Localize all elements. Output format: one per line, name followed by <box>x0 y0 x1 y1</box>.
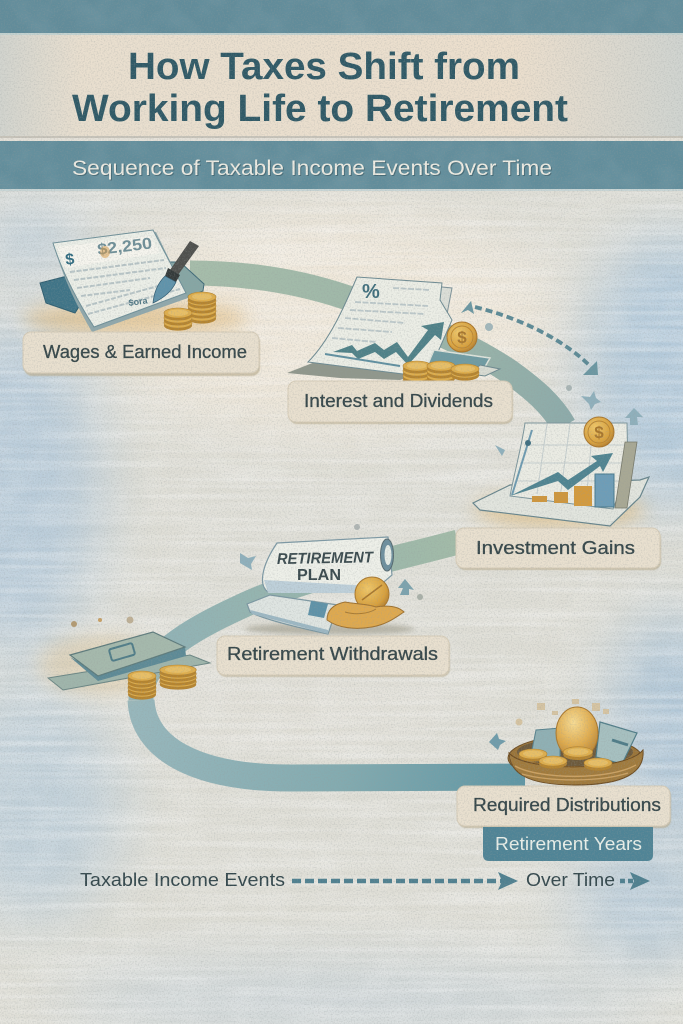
illustration: paycheck: $ <box>64 251 75 269</box>
label: investment gains <box>456 528 661 570</box>
coins <box>128 665 196 700</box>
decorative sparkles <box>354 323 643 530</box>
illustration: investment chart <box>473 417 649 528</box>
title: Working Life to Retirement <box>72 88 568 130</box>
label: retirement withdrawals <box>217 636 450 677</box>
bottom timeline caption <box>80 869 650 890</box>
badge: retirement years: Retirement Years <box>495 834 642 854</box>
check paper <box>53 232 188 332</box>
dollar coin: $ <box>594 423 604 442</box>
path segment: investment gains to withdrawals <box>141 542 458 700</box>
dollar coin <box>447 322 477 352</box>
flying bits <box>516 699 609 726</box>
coin stacks <box>403 361 479 389</box>
ruler <box>615 442 637 508</box>
dashed arrow: interest to gains <box>461 301 598 375</box>
top teal band <box>0 0 683 33</box>
illustration: interest statement <box>287 277 500 389</box>
dollar coin: $ <box>457 328 467 347</box>
trend arrow <box>510 453 613 496</box>
shadow <box>245 623 415 635</box>
rising line chart <box>333 322 444 365</box>
label: required distributions: Required Distributions <box>473 795 661 815</box>
sleeve <box>247 595 338 634</box>
shadow <box>287 362 425 380</box>
subtitle: Sequence of Taxable Income Events Over Time <box>73 158 553 181</box>
cash <box>530 728 560 762</box>
back rim of nest <box>508 736 642 780</box>
check text lines <box>70 260 180 314</box>
title <box>72 46 568 130</box>
subtitle: Sequence of Taxable Income Events Over Time <box>72 157 552 180</box>
check amount: $2,250 <box>96 235 153 259</box>
path segment: withdrawals to required distributions <box>141 700 525 778</box>
path segment: wages to investment gains <box>190 273 564 426</box>
illustration: retirement plan and hand <box>240 537 423 635</box>
ground stain <box>475 492 645 528</box>
caption: over time: Over Time <box>526 869 615 890</box>
header bands <box>0 0 683 191</box>
grid sheet <box>510 423 628 509</box>
illustration: paycheck: $ora <box>128 295 149 308</box>
lower bill <box>48 655 210 690</box>
pen <box>170 241 199 275</box>
label: wages and earned income: Wages & Earned Income <box>43 342 247 362</box>
dashed arrow <box>292 872 518 890</box>
cash <box>428 350 490 372</box>
label: wages and earned income <box>23 332 260 376</box>
title: How Taxes Shift from <box>128 46 520 88</box>
illustration: cash and coins <box>38 616 210 700</box>
coin stacks <box>164 292 216 331</box>
egg <box>556 707 598 759</box>
label: interest and dividends: Interest and Dividends <box>304 391 493 411</box>
top bills <box>70 647 186 681</box>
text lines <box>332 288 430 342</box>
caption: taxable income events: Taxable Income Events <box>80 869 285 890</box>
dollar coin <box>584 417 614 447</box>
badge: retirement years <box>483 827 653 861</box>
main statement <box>308 277 452 377</box>
ground stain <box>38 635 162 695</box>
timeline path <box>141 273 564 778</box>
label: investment gains: Investment Gains <box>476 538 635 558</box>
illustration: nest egg <box>489 699 643 785</box>
percent sign: % <box>362 281 380 303</box>
illustration: paycheck <box>23 230 247 336</box>
subtitle teal band <box>0 141 683 189</box>
scroll <box>262 537 392 592</box>
short arrow <box>620 872 650 890</box>
hand <box>327 602 404 628</box>
star icons <box>240 553 256 570</box>
label: required distributions <box>457 786 671 828</box>
money stack <box>40 274 80 313</box>
band mottling <box>0 0 683 33</box>
coin <box>355 577 389 611</box>
base paper <box>473 477 649 526</box>
title cream band <box>0 35 683 137</box>
ground stain <box>23 300 247 336</box>
illustration: retirement plan and hand: PLAN <box>297 567 341 584</box>
bars <box>532 496 547 502</box>
label: interest and dividends <box>288 381 513 424</box>
nest front <box>509 750 643 785</box>
scroll text: RETIREMENT <box>277 549 375 568</box>
back page <box>395 283 452 340</box>
label: retirement withdrawals: Retirement Withdrawals <box>227 644 438 664</box>
coins <box>519 747 612 771</box>
